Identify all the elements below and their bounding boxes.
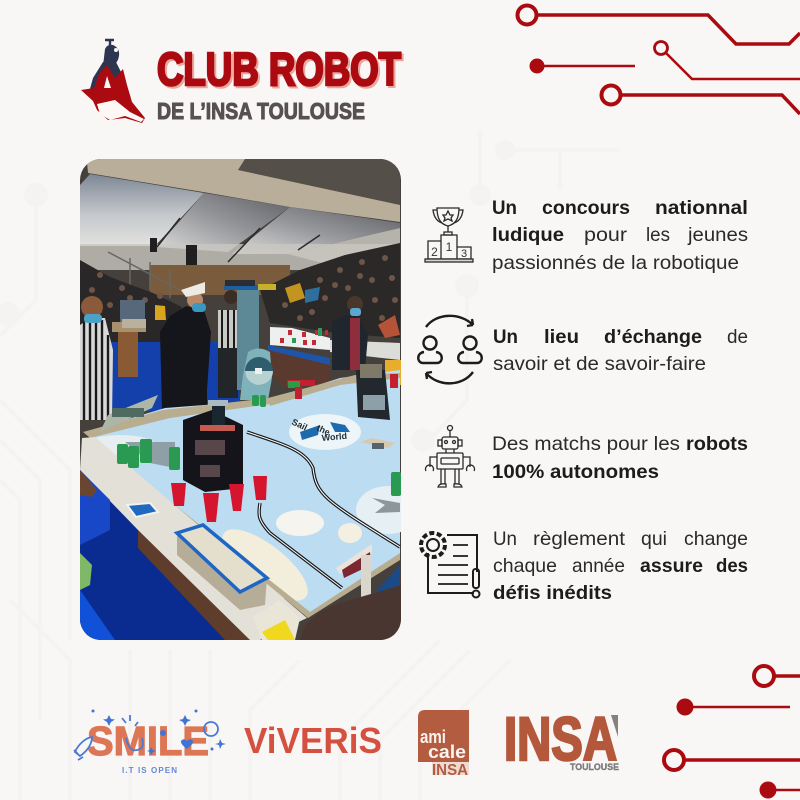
text: concours national: concours: [542, 197, 630, 219]
text: lieu d'échange: de: [727, 326, 748, 348]
icon: robot: [425, 426, 474, 487]
text: concours national: nationnal: [655, 197, 748, 219]
text: concours national: les: [646, 224, 670, 246]
icon: trophy podium: [425, 208, 473, 262]
photo: robotics competition table and crowd: [80, 159, 420, 640]
logo: Amicale INSA: INSA: [432, 762, 468, 779]
logo: Smile: SMILE: [87, 718, 209, 764]
text: lieu d'échange: [493, 326, 748, 375]
photo: robotics competition table and crowd: the: [315, 423, 332, 438]
logo: Viveris: ViVERiS: [244, 720, 382, 761]
text: concours national: jeunes: [687, 224, 748, 246]
icon: gear and rule document: [421, 533, 480, 598]
text: reglement: année: [572, 555, 625, 577]
text: lieu d'échange: lieu: [544, 326, 579, 348]
logo: INSA Toulouse: TOULOUSE: [570, 762, 619, 773]
text: reglement: règlement: [533, 528, 626, 550]
photo: robotics competition table and crowd: Sail: [290, 417, 309, 433]
title: CLUB ROBOT: [157, 43, 401, 95]
text: lieu d'échange: Un: [493, 326, 518, 348]
icon: trophy podium: 3: [461, 248, 467, 260]
text: matchs autonomes: 100% autonomes: [492, 461, 659, 483]
text: lieu d'échange: d’échange: [604, 326, 702, 348]
text: reglement: des: [716, 555, 748, 577]
text: matchs autonomes: [492, 433, 748, 483]
text: concours national: pour: [584, 224, 628, 246]
text: matchs autonomes: robots: [686, 433, 748, 455]
text: reglement: chaque: [493, 555, 557, 577]
text: concours national: [492, 197, 748, 274]
text: concours national: ludique: [492, 224, 564, 246]
subtitle: DE L’INSA TOULOUSE: [157, 98, 365, 124]
icon: trophy podium: 1: [446, 240, 453, 254]
logo: Amicale INSA: cale: [428, 742, 466, 762]
icon: trophy podium: 2: [431, 245, 438, 259]
text: reglement: assure: [640, 555, 703, 577]
circuit decoration: bottom right: [664, 666, 800, 798]
text: matchs autonomes: Des matchs pour les: [492, 433, 680, 455]
text: concours national: passionnés de la robotique: [492, 252, 739, 274]
logo: robot riding a fox: [81, 40, 145, 123]
photo: robotics competition table and crowd: World: [321, 431, 347, 443]
icon: two people exchanging: [418, 316, 482, 383]
logo: Amicale INSA: ami: [420, 727, 446, 747]
text: concours national: Un: [492, 197, 517, 219]
logo: Smile: [74, 710, 226, 775]
circuit decoration: top right: [518, 6, 800, 114]
text: reglement: change: [684, 528, 748, 550]
text: lieu d'échange: savoir et de savoir-faire: [493, 353, 706, 375]
text: reglement: Un: [493, 528, 517, 550]
text: reglement: qui: [641, 528, 667, 550]
logo: Amicale INSA: [418, 710, 469, 779]
text: reglement: [493, 528, 748, 604]
logo: Smile: I.T IS OPEN: [122, 766, 177, 775]
text: reglement: défis inédits: [493, 582, 612, 604]
title: CLUB ROBOT: [159, 45, 403, 97]
logo: INSA Toulouse: INSA: [504, 705, 617, 773]
